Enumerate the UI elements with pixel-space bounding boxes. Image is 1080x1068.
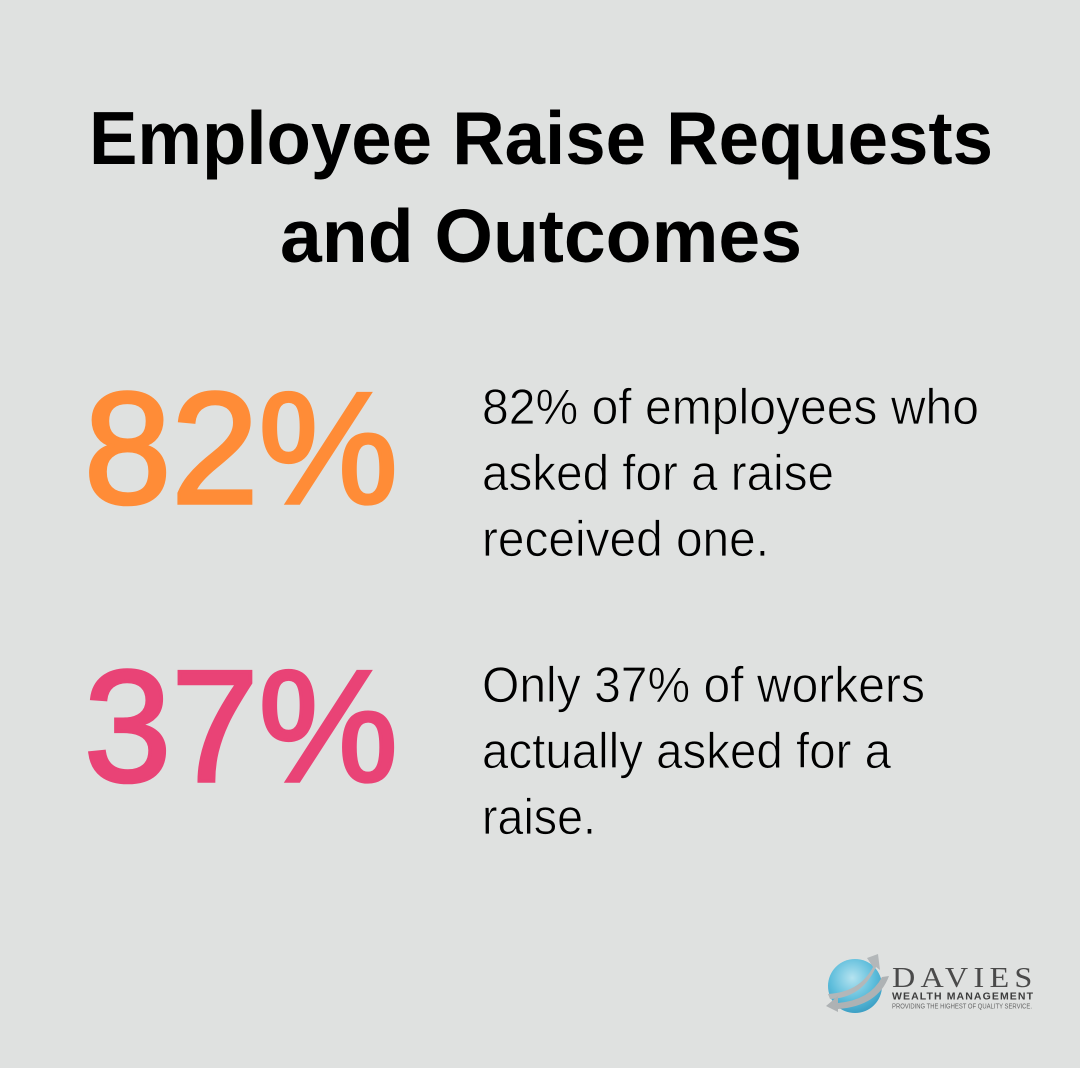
title: and Outcomes: [280, 194, 802, 278]
description: 37%: Only 37% of workers: [482, 657, 925, 713]
title: [89, 96, 993, 278]
description: 82%: asked for a raise: [482, 445, 834, 501]
icon: globe with arrows: [826, 954, 889, 1013]
logo subtitle: WEALTH MANAGEMENT: [892, 990, 1034, 1002]
stat: 37%: 37%: [84, 637, 398, 815]
logo: Davies Wealth Management: [826, 954, 1034, 1013]
description: 82%: [482, 379, 979, 567]
logo wordmark: DAVIES: [892, 962, 1032, 993]
logo tagline: PROVIDING THE HIGHEST OF QUALITY SERVICE.: [892, 1004, 1032, 1010]
description: 82%: 82% of employees who: [482, 379, 979, 435]
title: Employee Raise Requests: [89, 96, 993, 180]
description: 37%: [482, 657, 925, 845]
description: 37%: actually asked for a: [482, 723, 891, 779]
stat: 82%: 82%: [84, 359, 398, 537]
description: 82%: received one.: [482, 511, 769, 567]
description: 37%: raise.: [482, 789, 596, 845]
